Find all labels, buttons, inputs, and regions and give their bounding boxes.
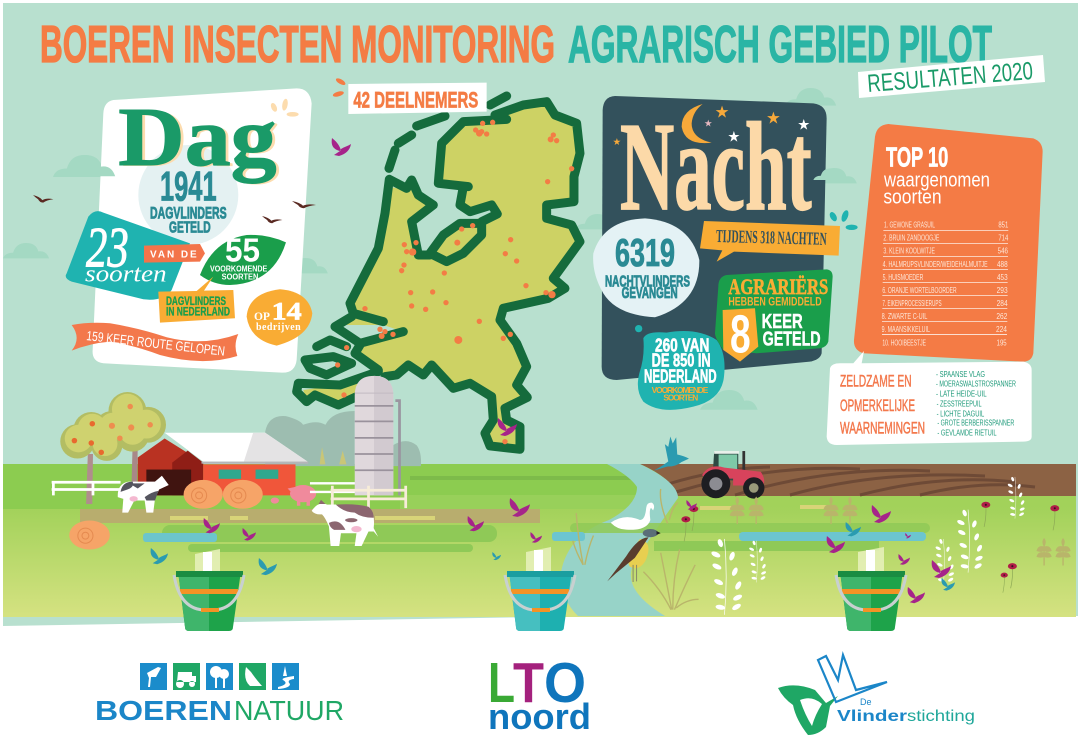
sun rays (270, 98, 299, 117)
ranking table: 714 (998, 233, 1009, 243)
ground (3, 464, 1076, 617)
stat: 55 voorkomende soorten: 55 (225, 233, 260, 270)
stat: 1941: 1941 (160, 163, 217, 210)
cream fence (310, 483, 356, 492)
logo: lto noord: O (544, 651, 586, 715)
reeds (573, 489, 699, 610)
species list: - LICHTE DAGUIL (937, 408, 985, 418)
logo: de vlinderstichting: De (860, 697, 872, 707)
ranking table: 293 (997, 285, 1008, 295)
heading: nacht: Nacht (620, 97, 812, 237)
stat: 1941 (150, 163, 227, 236)
drops (828, 209, 858, 230)
stat: 260 van de 850: NEDERLAND (644, 366, 717, 387)
panel: agrariers: KEER (762, 311, 803, 333)
stat: 55 voorkomende soorten: SOORTEN (222, 271, 258, 281)
swan (611, 503, 654, 530)
cow 1 (118, 476, 169, 513)
ranking table: 453 (997, 272, 1008, 282)
badge: op 14 bedrijven: bedrijven (256, 322, 301, 333)
heading: top 10: TOP 10 (886, 141, 948, 172)
ranking table: 851 (998, 220, 1009, 230)
stat: 1941: GETELD (169, 219, 211, 236)
logo: lto noord: L (488, 651, 515, 715)
birds (33, 195, 316, 223)
ranking table: 2. BRUIN ZANDOOGJE (883, 233, 940, 243)
callout: dagvlinders in nederland: IN NEDERLAND (166, 305, 230, 319)
title: BOEREN INSECTEN MONITORING (40, 16, 555, 74)
icon: moon and stars: ★ (797, 117, 810, 133)
logo icons (140, 663, 299, 690)
ranking table: 10. HOOIBEESTJE (882, 338, 926, 348)
ranking table: 6. ORANJE WORTELBOORDER (882, 285, 957, 295)
label: 42 deelnemers (348, 83, 487, 114)
ranking table: 7. EIKENPROCESSIERUPS (882, 298, 942, 308)
label: 42 deelnemers: 42 DEELNEMERS (353, 87, 478, 112)
species list: - MOERASWALSTROSPANNER (936, 379, 1016, 389)
logo: de vlinderstichting: stichting (907, 708, 975, 725)
heading: dag: Dag (118, 92, 277, 184)
ranking table: 195 (997, 338, 1007, 348)
stat: 23 soorten: 23 (86, 218, 129, 280)
background trees (265, 411, 421, 466)
stat: 260 van de 850: 260 VAN (655, 335, 709, 356)
panel: agrariers: GETELD (763, 329, 821, 351)
stat: 6319 (593, 218, 699, 317)
heading: top 10 (883, 141, 990, 208)
species list: - SPAANSE VLAG (936, 369, 985, 379)
ribbon: 159 keer route gelopen (72, 323, 238, 361)
stat: 23 soorten (66, 211, 190, 300)
wagtail (607, 529, 661, 582)
stat: 55 voorkomende soorten: VOORKOMENDE (210, 263, 268, 273)
ranking table: 546 (998, 246, 1008, 256)
stat: 260 van de 850: DE 850 IN (652, 350, 711, 371)
panel: nacht (593, 96, 858, 410)
ranking table (882, 220, 1009, 348)
silo (355, 376, 400, 495)
bucket 3 (836, 547, 906, 631)
right scene (573, 437, 1071, 615)
ranking table: 284 (997, 298, 1008, 308)
sparks (332, 77, 346, 98)
bucket 2 (505, 547, 575, 631)
callout: dagvlinders in nederland (158, 277, 235, 323)
icon: moon and stars: ★ (766, 108, 781, 127)
logo: boerennatuur (95, 663, 344, 726)
trees (60, 392, 166, 504)
panel: agrariers (715, 269, 833, 364)
bucket 1 (174, 549, 244, 631)
participant dots (335, 120, 574, 444)
stat: 260 van de 850 (635, 325, 725, 410)
icon: moon and stars: ★ (727, 130, 740, 146)
farm scene (52, 376, 421, 549)
callout: tijdens 318 nachten (700, 221, 840, 262)
cow 2 (312, 500, 378, 546)
blue bird (654, 437, 689, 471)
heading: top 10: waargenomen (883, 169, 990, 192)
species list (936, 369, 1016, 437)
pig (271, 485, 316, 506)
ranking table: 488 (997, 259, 1008, 269)
stat: 6319: NACHTVLINDERS (605, 273, 690, 290)
callout: zeldzame waarnemingen: WAARNEMINGEN (840, 419, 925, 438)
species list: - GROTE BERBERISSPANNER (937, 418, 1014, 428)
logo: lto noord (488, 651, 591, 737)
ranking table: 8. ZWARTE C-UIL (882, 311, 928, 321)
ranking table: 224 (996, 324, 1007, 334)
logo: de vlinderstichting: Vlinder (837, 708, 907, 725)
ranking table: 1. GEWONE GRASUIL (884, 220, 935, 230)
tag: van de: VAN DE (150, 250, 197, 261)
species list: - LATE HEIDE-UIL (936, 388, 987, 398)
heading: top 10: soorten (883, 185, 942, 208)
barn (138, 433, 308, 495)
icon: moon and stars (613, 102, 810, 147)
ranking table: 3. KLEIN KOOLWITJE (883, 246, 935, 256)
panel: agrariers: 8 (730, 305, 751, 364)
callout: zeldzame waarnemingen: OPMERKELIJKE (840, 396, 915, 415)
stat: 260 van de 850: SOORTEN (663, 393, 698, 403)
logo: boerennatuur: BOEREN (95, 695, 232, 726)
ribbon: 159 keer route gelopen: 159 KEER ROUTE GELOPEN (86, 328, 226, 359)
callout: zeldzame waarnemingen: ZELDZAME EN (840, 372, 912, 391)
tractor (701, 451, 764, 499)
ranking table: 5. HUISMOEDER (883, 272, 923, 282)
map outline (297, 96, 580, 449)
fence (52, 482, 121, 495)
callout: dagvlinders in nederland: DAGVLINDERS (166, 294, 226, 308)
callout: zeldzame waarnemingen (827, 351, 1032, 445)
clouds (3, 88, 857, 410)
map: netherlands with participants (297, 77, 580, 449)
ranking table: 262 (996, 311, 1008, 321)
stat: 55 voorkomende soorten (200, 233, 286, 285)
stat: 23 soorten: soorten (85, 262, 167, 288)
badge: op 14 bedrijven: OP (254, 311, 270, 323)
hay bales (69, 480, 263, 549)
species list: - GEVLAMDE RIETUIL (937, 427, 997, 437)
stat: 260 van de 850: VOORKOMENDE (652, 385, 709, 395)
badge: op 14 bedrijven: 14 (272, 297, 302, 325)
badge: op 14 bedrijven (247, 289, 312, 346)
ranking table: 9. MAANSIKKELUIL (882, 324, 930, 334)
panel: agrariers: AGRARIËRS (728, 274, 828, 299)
icon: moon and stars: ★ (715, 102, 730, 121)
field plants (681, 477, 1071, 615)
logo: boerennatuur: NATUUR (234, 695, 344, 726)
ranking table: 4. HALMRUPSVLINDER/WEIDEHALMUITJE (883, 259, 988, 269)
map land (347, 105, 578, 447)
heading: dag: Dag (122, 93, 280, 185)
logo: lto noord: T (513, 651, 544, 715)
butterflies (204, 138, 951, 603)
panel: top 10 (827, 124, 1043, 445)
stat: 1941: DAGVLINDERS (150, 204, 227, 223)
tag: van de (144, 244, 205, 263)
callout: tijdens 318 nachten: TIJDENS 318 NACHTEN (716, 226, 827, 249)
logo: lto noord: noord (488, 696, 591, 737)
icon: moon and stars: ★ (613, 137, 621, 147)
panel: agrariers: HEBBEN GEMIDDELD (728, 295, 822, 309)
species list: - ZESSTREEPUIL (937, 399, 982, 409)
icon: moon and stars: ★ (704, 119, 712, 129)
stat: 6319: GEVANGEN (622, 285, 678, 302)
stat: 6319: 6319 (615, 231, 675, 275)
panel: dag (53, 88, 312, 373)
logo: de vlinderstichting (778, 655, 975, 735)
